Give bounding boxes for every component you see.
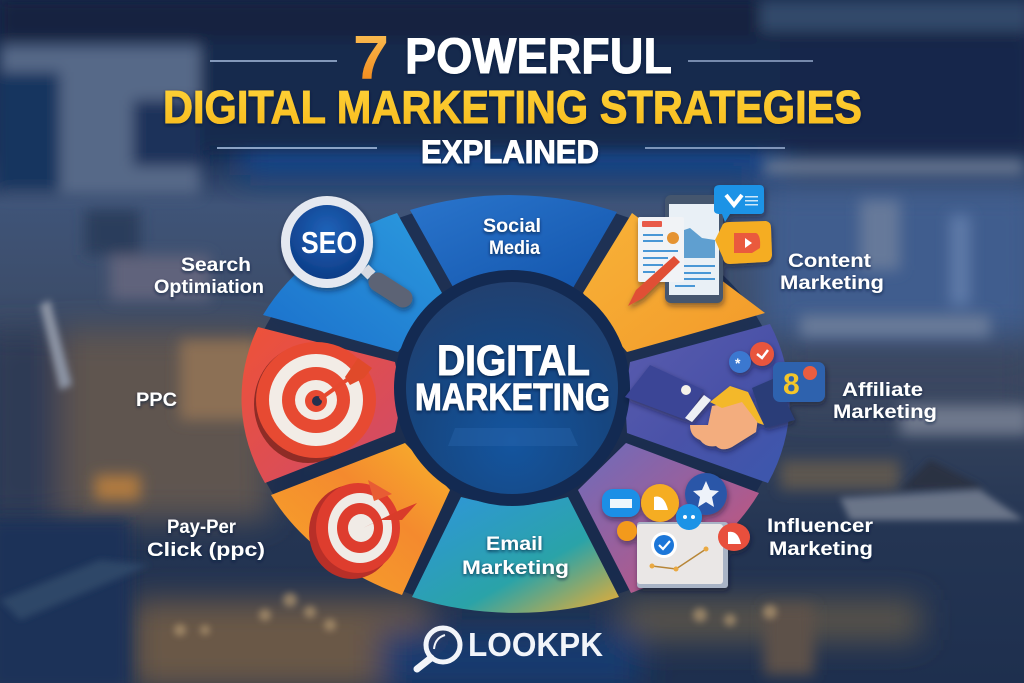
- label: social media: Media: [489, 238, 540, 259]
- title line: powerful: POWERFUL: [405, 28, 672, 84]
- icon: PPC target: [254, 342, 376, 463]
- logo: lookpk: [417, 626, 603, 669]
- label: search optimisation: Search: [181, 255, 251, 276]
- icon: content marketing phone and bubbles: [628, 185, 772, 306]
- central hub: MARKETING: [415, 377, 610, 419]
- segment: social media: [410, 195, 617, 288]
- segment: affiliate marketing: [625, 324, 790, 483]
- label: email marketing: Email: [486, 534, 543, 555]
- label: affiliate marketing: Marketing: [833, 402, 937, 423]
- icon: pay-per-click target: [309, 480, 417, 579]
- label: content marketing: Marketing: [780, 273, 884, 294]
- label: social media: Social: [483, 216, 541, 237]
- title line: digital marketing strategies: DIGITAL MARKETING STRATEGIES: [163, 81, 862, 133]
- hub label: DIGITAL: [437, 337, 590, 385]
- label: pay-per click: Pay-Per: [167, 517, 237, 538]
- icon: affiliate handshake: 8: [783, 368, 800, 401]
- segment: influencer marketing: [578, 443, 759, 593]
- icon: SEO magnifier: SEO: [301, 225, 357, 260]
- label: content marketing: [780, 251, 884, 294]
- laptop outline in hub: [448, 428, 578, 446]
- segment: ppc: [241, 327, 402, 483]
- central hub: [394, 270, 630, 506]
- label: pay-per click: Click (ppc): [147, 540, 265, 561]
- label: influencer marketing: [767, 516, 874, 560]
- label: search optimisation: [154, 255, 264, 298]
- label: influencer marketing: Influencer: [767, 516, 874, 537]
- title numeral 7: 7: [353, 24, 389, 93]
- segment: search optimisation: [263, 213, 442, 352]
- icon: affiliate handshake: [625, 342, 825, 449]
- label: affiliate marketing: Affiliate: [842, 380, 923, 401]
- label: social media: [483, 216, 541, 259]
- label: email marketing: [462, 534, 569, 579]
- title line: explained: EXPLAINED: [421, 134, 599, 170]
- title: [163, 24, 862, 170]
- segment: email marketing: [412, 497, 619, 613]
- marketing wheel: [241, 195, 790, 613]
- logo: lookpk: LOOKPK: [468, 626, 603, 663]
- label: email marketing: Marketing: [462, 558, 569, 579]
- icon: affiliate handshake: *: [735, 355, 741, 371]
- label: influencer marketing: Marketing: [769, 539, 873, 560]
- label: affiliate marketing: [833, 380, 937, 423]
- icon: SEO magnifier: [281, 196, 403, 298]
- segment: content marketing: [583, 213, 765, 352]
- label: search optimisation: Optimiation: [154, 277, 264, 298]
- label: pay-per click: [147, 517, 265, 561]
- label: content marketing: Content: [788, 251, 872, 272]
- label: ppc: PPC: [136, 390, 177, 411]
- icon: influencer dashboard and bubbles: [602, 473, 750, 588]
- segment: pay-per click: [271, 443, 450, 595]
